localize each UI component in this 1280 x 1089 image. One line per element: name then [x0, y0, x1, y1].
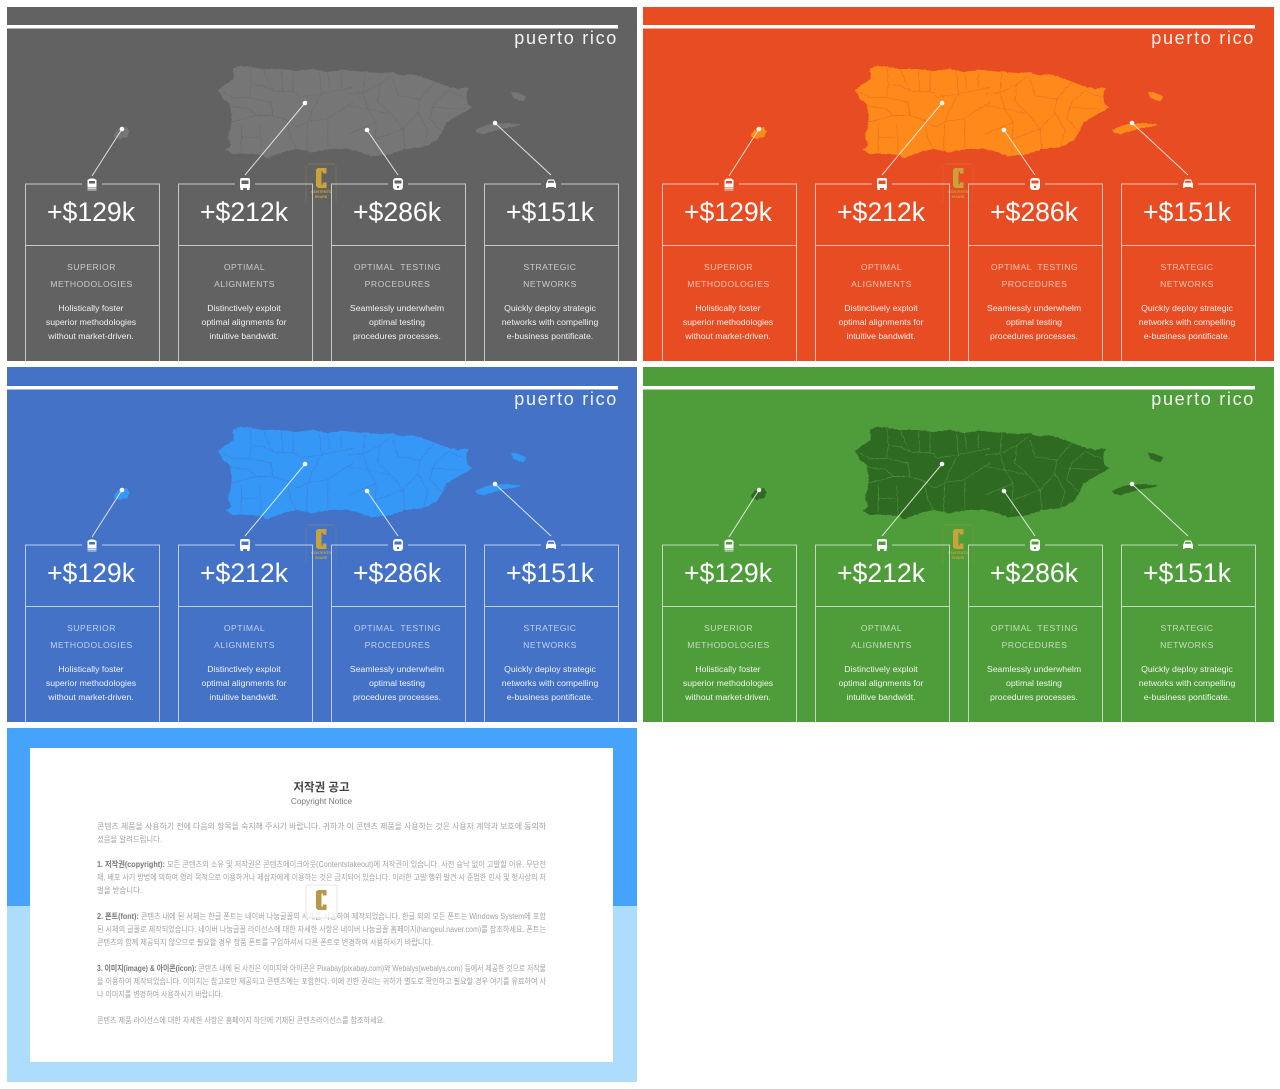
card 4: +$151k	[1143, 197, 1232, 227]
notice body text: 재, 배포 사기 방법에 의하여 영리 목적으로 이용하거나 제삼자에게 이용하는 것은 금지되어 있습니다. 이러한 고발 행위 발견 시 준엄한 민사 및 형사상의 처	[97, 872, 546, 882]
card 2: +$212k	[200, 558, 289, 588]
card 4	[484, 180, 618, 361]
map: puerto rico	[751, 66, 1163, 158]
watermark logo: CONTENTS	[311, 551, 331, 555]
card 3: +$286k	[353, 558, 442, 588]
card 2: optimal alignments for	[839, 678, 924, 688]
card 1: superior methodologies	[683, 317, 774, 327]
card 4: NETWORKS	[523, 279, 577, 289]
panel: green	[643, 367, 1274, 722]
header bar	[643, 25, 1255, 28]
map: puerto rico	[751, 427, 1163, 519]
card 1: +$129k	[684, 558, 773, 588]
card 3: PROCEDURES	[1002, 640, 1067, 650]
card 4: e-business pontificate.	[507, 692, 593, 702]
card 4: STRATEGIC	[1160, 262, 1214, 272]
notice body text: 나 이미지를 변경하여 사용하시기 바랍니다.	[97, 989, 223, 999]
card 2: ALIGNMENTS	[851, 640, 912, 650]
card 1	[26, 540, 160, 722]
card 4: e-business pontificate.	[1144, 331, 1230, 341]
card 1: +$129k	[684, 197, 773, 227]
card 2: ALIGNMENTS	[214, 640, 275, 650]
card 1: +$129k	[47, 197, 136, 227]
card 3: PROCEDURES	[1002, 279, 1067, 289]
card 1: Holistically foster	[695, 303, 761, 313]
card 2	[816, 539, 950, 722]
watermark logo: SHARE	[952, 195, 965, 199]
card 1: superior methodologies	[683, 678, 774, 688]
card 4: networks with compelling	[502, 317, 598, 327]
card 2: +$212k	[837, 197, 926, 227]
card 2: ALIGNMENTS	[214, 279, 275, 289]
card 4: NETWORKS	[1160, 279, 1214, 289]
card 3	[968, 178, 1102, 361]
map: puerto rico	[114, 66, 526, 158]
card 1: +$129k	[47, 558, 136, 588]
card 2: +$212k	[837, 558, 926, 588]
card 1: SUPERIOR	[67, 623, 116, 633]
card 1: METHODOLOGIES	[50, 279, 133, 289]
notice body text: 1. 저작권(copyright): 모든 콘텐츠의 소유 및 저작권은 콘텐츠에이크아웃(Contentstakeout)에 저작권이 있습니다. 사전 승낙 없이 고발할 이유, 무단전	[97, 859, 546, 869]
card 3	[968, 539, 1102, 722]
card 3: optimal testing	[1006, 678, 1062, 688]
map: puerto rico	[114, 427, 526, 519]
card 4: networks with compelling	[1139, 678, 1235, 688]
card 3: OPTIMAL TESTING	[991, 623, 1078, 633]
notice body text: 벌을 받습니다.	[97, 885, 142, 895]
card 2: Distinctively exploit	[844, 303, 918, 313]
card 3: optimal testing	[369, 317, 425, 327]
watermark logo: CONTENTS	[948, 190, 968, 194]
card 4	[1122, 180, 1256, 361]
card 4: Quickly deploy strategic	[504, 664, 597, 674]
card 2: optimal alignments for	[839, 317, 924, 327]
card 4: e-business pontificate.	[507, 331, 593, 341]
watermark logo	[943, 525, 973, 563]
card 2	[178, 178, 312, 361]
connector lines	[729, 101, 1188, 176]
card 3: PROCEDURES	[365, 640, 430, 650]
card 2: optimal alignments for	[202, 317, 287, 327]
notice body text: 을 이용하여 제작되었습니다. 이미지는 참고로만 제공되고 콘텐츠에는 포함한다. 이에 관한 권리는 귀하가 별도로 확인하고 필요할 경우 여기를 유료하여 사	[97, 976, 547, 986]
notice body text: 3. 이미지(image) & 아이콘(icon): 콘텐츠 내에 된 사진은 이미지와 아이콘은 Pixabay(pixabay.com)와 Webalys(webalys.com) 등에서 제공한 것으로 저작물	[97, 963, 546, 973]
heading: puerto rico	[1151, 28, 1255, 48]
watermark logo	[306, 164, 336, 202]
card 4: NETWORKS	[523, 640, 577, 650]
card 1: METHODOLOGIES	[687, 640, 770, 650]
card 2: intuitive bandwidt.	[846, 331, 916, 341]
card 3: optimal testing	[1006, 317, 1062, 327]
card 4: +$151k	[506, 558, 595, 588]
watermark logo: CONTENTS	[311, 190, 331, 194]
watermark logo: CONTENTS	[948, 551, 968, 555]
watermark logo	[943, 164, 973, 202]
panel: copyright notice	[7, 728, 637, 1082]
card 1: SUPERIOR	[704, 623, 753, 633]
panel: orange	[643, 7, 1274, 361]
connector lines	[729, 462, 1188, 537]
card 4: +$151k	[1143, 558, 1232, 588]
watermark logo: SHARE	[315, 556, 328, 560]
card 3: Seamlessly underwhelm	[350, 664, 444, 674]
card 1: METHODOLOGIES	[687, 279, 770, 289]
card 1: without market-driven.	[684, 331, 771, 341]
watermark logo: SHARE	[315, 195, 328, 199]
notice subtitle: Copyright Notice	[291, 796, 353, 806]
heading: puerto rico	[1151, 389, 1255, 409]
card 3: +$286k	[990, 197, 1079, 227]
card 4: Quickly deploy strategic	[504, 303, 597, 313]
card 1: without market-driven.	[684, 692, 771, 702]
header bar	[7, 25, 618, 28]
card 3	[332, 178, 466, 361]
watermark logo: SHARE	[952, 556, 965, 560]
card 2: OPTIMAL	[861, 623, 902, 633]
card 1	[26, 178, 160, 361]
card 2: intuitive bandwidt.	[846, 692, 916, 702]
card 2: Distinctively exploit	[207, 303, 281, 313]
watermark logo	[306, 525, 336, 563]
card 2: Distinctively exploit	[844, 664, 918, 674]
card 4: networks with compelling	[1139, 317, 1235, 327]
card 4: STRATEGIC	[1160, 623, 1214, 633]
notice body text: 콘텐츠 제품을 사용하기 전에 다음의 항목을 숙지해 주시기 바랍니다. 귀하가 이 콘텐츠 제품을 사용하는 것은 사용자 계약과 보호에 동의하	[97, 821, 547, 831]
card 2: OPTIMAL	[224, 262, 265, 272]
card 4: e-business pontificate.	[1144, 692, 1230, 702]
connector lines	[92, 462, 551, 537]
notice body text: 2. 폰트(font): 콘텐츠 내에 된 서체는 한글 폰트는 네이버 나눔글꼴의 서체를 사용하여 제작되었습니다. 한글 외의 모든 폰트는 Windows System에 포함	[97, 911, 547, 921]
card 2	[816, 178, 950, 361]
card 3: PROCEDURES	[365, 279, 430, 289]
card 3: Seamlessly underwhelm	[987, 664, 1081, 674]
watermark logo	[306, 885, 337, 918]
card 3: Seamlessly underwhelm	[987, 303, 1081, 313]
header bar	[7, 386, 618, 390]
card 2: intuitive bandwidt.	[209, 692, 279, 702]
card 3: OPTIMAL TESTING	[354, 262, 441, 272]
card 2: OPTIMAL	[861, 262, 902, 272]
card 1: SUPERIOR	[704, 262, 753, 272]
card 1: Holistically foster	[58, 303, 124, 313]
card 2: +$212k	[200, 197, 289, 227]
card 3: procedures processes.	[353, 331, 441, 341]
card 1	[662, 178, 796, 361]
card 4: Quickly deploy strategic	[1141, 303, 1234, 313]
card 2: ALIGNMENTS	[851, 279, 912, 289]
card 3: OPTIMAL TESTING	[354, 623, 441, 633]
panel: blue	[7, 367, 637, 722]
notice title: 저작권 공고	[293, 780, 350, 794]
panel: gray	[7, 7, 637, 361]
card 1: superior methodologies	[46, 678, 137, 688]
card 1: without market-driven.	[47, 692, 134, 702]
notice body text	[97, 821, 547, 1025]
card 1: Holistically foster	[695, 664, 761, 674]
heading: puerto rico	[514, 28, 618, 48]
card 1: Holistically foster	[58, 664, 124, 674]
notice body text: 된 시체의 글꼴로 제작되었습니다. 네이버 나눔글꼴 라이선스에 대한 자세한 사항은 네이버 나눔글꼴 홈페이지(hangeul.naver.com)를 참조하세요. 폰트는	[97, 924, 546, 934]
card 2: intuitive bandwidt.	[209, 331, 279, 341]
card 3: OPTIMAL TESTING	[991, 262, 1078, 272]
header bar	[643, 386, 1255, 390]
card 3: optimal testing	[369, 678, 425, 688]
card 4: Quickly deploy strategic	[1141, 664, 1234, 674]
card 4: NETWORKS	[1160, 640, 1214, 650]
card 1: superior methodologies	[46, 317, 137, 327]
connector lines	[92, 101, 551, 176]
card 4: STRATEGIC	[523, 262, 577, 272]
card 4: +$151k	[506, 197, 595, 227]
card 1: SUPERIOR	[67, 262, 116, 272]
card 4	[484, 540, 618, 722]
card 2: Distinctively exploit	[207, 664, 281, 674]
card 1	[662, 540, 796, 722]
card 1: without market-driven.	[47, 331, 134, 341]
heading: puerto rico	[514, 389, 618, 409]
notice body text: 셨음을 알려드립니다.	[97, 834, 162, 844]
notice body text: 콘텐츠 제품 라이선스에 대한 자세한 사항은 홈페이지 하단에 기재된 콘텐츠라이선스를 참조하세요.	[97, 1015, 385, 1025]
card 2: optimal alignments for	[202, 678, 287, 688]
card 3: Seamlessly underwhelm	[350, 303, 444, 313]
card 3: procedures processes.	[990, 692, 1078, 702]
card 2: OPTIMAL	[224, 623, 265, 633]
card 3	[332, 539, 466, 722]
card 4: STRATEGIC	[523, 623, 577, 633]
notice body text: 콘텐츠의 함께 제공되지 않으므로 필요할 경우 정품 폰트를 구입하셔서 다른 폰트로 변경하여 사용하시기 바랍니다.	[97, 937, 433, 947]
card 2	[178, 539, 312, 722]
card 3: procedures processes.	[990, 331, 1078, 341]
card 3: +$286k	[990, 558, 1079, 588]
card 4	[1122, 540, 1256, 722]
card 4: networks with compelling	[502, 678, 598, 688]
card 3: procedures processes.	[353, 692, 441, 702]
card 1: METHODOLOGIES	[50, 640, 133, 650]
card 3: +$286k	[353, 197, 442, 227]
